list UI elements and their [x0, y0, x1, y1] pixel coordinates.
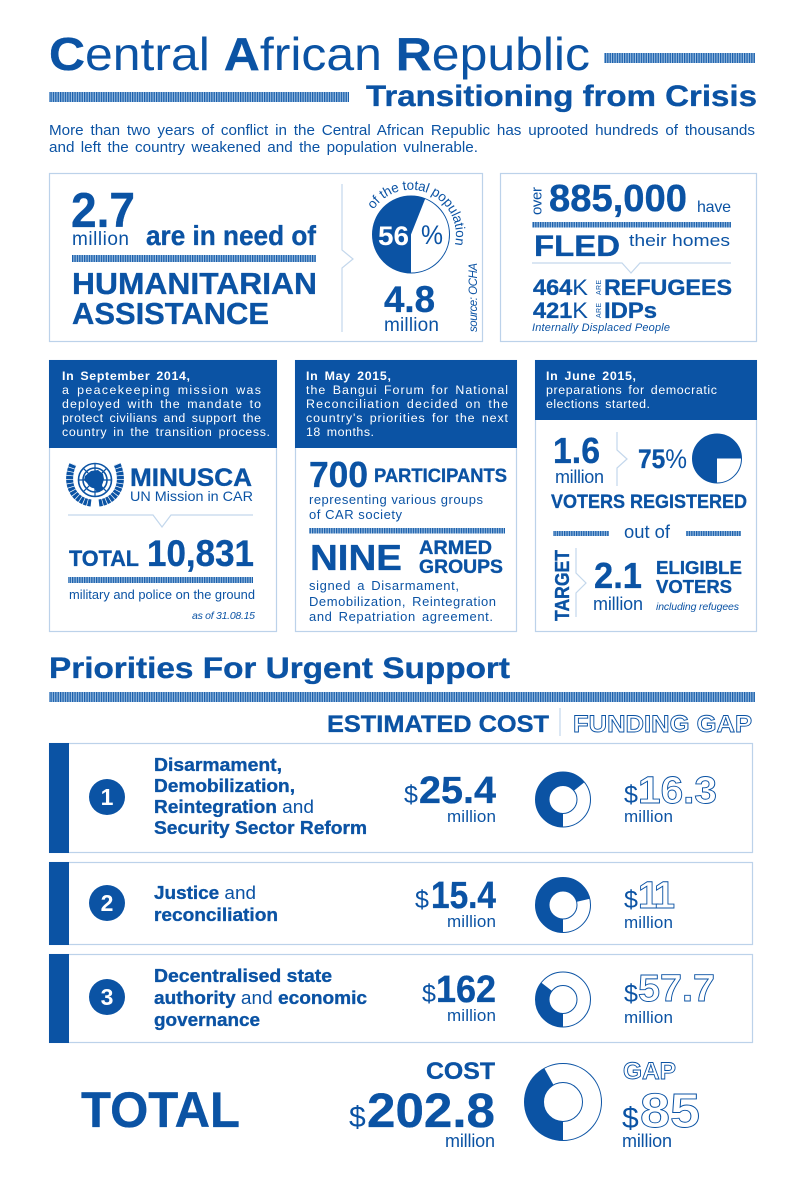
header: September 2014: deployed with the mandate to — [62, 397, 261, 411]
heading: fled their homes: their homes — [629, 231, 730, 250]
header: May 2015 — [295, 360, 517, 448]
heading: fled their homes: FLED — [534, 230, 620, 263]
divider label: out of — [553, 522, 741, 542]
total cost: 202.8 — [367, 1085, 495, 1138]
cost: million — [447, 807, 496, 826]
number badge 3 — [89, 979, 125, 1015]
header: June 2015: In June 2015, — [546, 369, 636, 383]
curved label: of the total population: of the total population — [369, 181, 466, 245]
statistic: total 10,831 — [69, 533, 254, 574]
source note: source: OCHA — [468, 263, 480, 332]
funding gap: $ — [624, 980, 638, 1008]
panel: priority 2 — [49, 862, 752, 945]
cost: 15.4 — [431, 875, 496, 917]
statistic: 2.7 million: 2.7 — [71, 184, 135, 238]
number badge 1 — [89, 779, 125, 815]
total cost: million — [445, 1131, 495, 1151]
cost: $ — [404, 781, 418, 809]
heading: humanitarian assistance: HUMANITARIAN — [72, 266, 317, 301]
panel: elections — [535, 360, 757, 632]
heading: are in need of: are in need of — [146, 220, 317, 251]
header: September 2014 — [49, 360, 277, 448]
header: May 2015: 18 months. — [306, 425, 374, 439]
statistic: 700 participants — [309, 454, 507, 495]
arrow: chevron divider — [342, 184, 353, 332]
intro text: and left the country weakened and the population vulnerable. — [49, 140, 478, 156]
header: September 2014: a peacekeeping mission was — [62, 383, 261, 397]
rotated label: target: TARGET — [552, 550, 574, 621]
caption: military and police: military and police on the ground — [69, 588, 255, 602]
statistic: 4.8 million: 4.8 — [384, 279, 435, 320]
heading: MINUSCA — [130, 464, 253, 504]
heading: fled their homes — [534, 230, 730, 263]
funding gap: million — [624, 913, 673, 932]
priority title: Justice and — [154, 882, 256, 903]
statistic: 2.7 million: million — [72, 229, 129, 250]
total gap: $ — [622, 1102, 639, 1135]
funding gap: 11 — [638, 875, 675, 917]
date note: as of 31.08.15 — [192, 610, 255, 622]
header: June 2015: elections started. — [546, 397, 650, 411]
statistic: refugees: 464K — [533, 275, 588, 300]
heading: MINUSCA: MINUSCA — [130, 464, 252, 492]
total gap: GAP — [623, 1058, 676, 1085]
label: total: TOTAL — [81, 1082, 240, 1138]
donut chart — [535, 972, 590, 1027]
icon: UN emblem — [70, 462, 120, 503]
total cost — [349, 1058, 495, 1151]
panel: priority 1 — [49, 743, 752, 853]
cost: million — [447, 912, 496, 931]
statistic: 700 participants: 700 — [309, 454, 368, 495]
statistic: nine armed groups — [310, 537, 503, 578]
funding gap: 16.3 — [638, 770, 717, 812]
heading: over 885,000 have: 885,000 — [549, 178, 687, 220]
priority title: Security Sector Reform — [154, 817, 367, 838]
funding gap — [624, 875, 675, 932]
header: May 2015: In May 2015, — [306, 369, 391, 383]
arrow: callout line — [532, 263, 731, 273]
cost: $ — [415, 886, 429, 914]
priority title: governance — [154, 1009, 260, 1030]
pie chart: 56 percent — [372, 196, 450, 273]
arrow: callout line — [68, 515, 253, 527]
cost: 162 — [436, 969, 496, 1011]
total cost: COST — [426, 1058, 495, 1085]
donut chart — [536, 772, 590, 827]
header: May 2015: country's priorities for the next — [306, 411, 509, 425]
panel: displaced people — [500, 174, 756, 342]
donut chart: total — [524, 1064, 602, 1141]
statistic: IDPs — [533, 298, 657, 323]
funding gap: $ — [624, 781, 638, 809]
statistic: 2.1 million: 2.1 — [594, 555, 642, 596]
priority title: Reintegration and — [154, 796, 314, 817]
cost: $ — [422, 980, 436, 1008]
priority title — [154, 965, 367, 1030]
header: September 2014: In September 2014, — [62, 369, 190, 383]
column headings — [327, 708, 752, 738]
header: September 2014: protect civilians and support the — [62, 411, 261, 425]
number badge 2: 2 — [101, 890, 113, 916]
statistic: refugees — [533, 275, 732, 300]
priority title: Decentralised state — [154, 965, 332, 986]
funding gap — [624, 770, 717, 826]
cost — [422, 969, 496, 1025]
total gap — [622, 1058, 700, 1151]
divider label: out of: out of — [624, 522, 671, 542]
column headings: FUNDING GAP — [573, 711, 752, 738]
statistic: nine armed groups: GROUPS — [419, 557, 503, 578]
pie chart: 56 percent: % — [421, 220, 443, 250]
heading: eligible voters: including refugees — [656, 601, 740, 613]
panel: priority 3 — [49, 954, 752, 1043]
header: May 2015: the Bangui Forum for National — [306, 383, 508, 397]
heading: over 885,000 have — [528, 178, 731, 220]
priority title — [154, 882, 278, 925]
statistic: nine armed groups: ARMED — [419, 538, 492, 559]
number badge 1: 1 — [101, 784, 114, 810]
statistic: 700 participants: PARTICIPANTS — [374, 466, 507, 487]
total row — [81, 1058, 700, 1151]
column headings: ESTIMATED COST — [327, 711, 549, 738]
statistic: IDPs: 421K — [533, 298, 588, 323]
funding gap: million — [624, 807, 673, 826]
priority title: Demobilization, — [154, 775, 295, 796]
caption: agreement: and Repatriation agreement. — [309, 609, 493, 624]
header: June 2015 — [535, 360, 757, 420]
heading: humanitarian assistance: ASSISTANCE — [72, 296, 269, 331]
caption: representing groups: representing various groups — [309, 492, 484, 507]
statistic: 2.1 million — [593, 555, 643, 614]
statistic: 4.8 million: million — [384, 315, 439, 336]
caption: agreement — [309, 578, 496, 624]
statistic: 1.6 million: 1.6 — [553, 430, 600, 471]
statistic: IDPs: ARE — [596, 303, 603, 318]
panel: Bangui Forum — [295, 360, 517, 632]
arrow: chevron divider — [576, 548, 586, 617]
funding gap: $ — [624, 886, 638, 914]
priority title: authority and economic — [154, 987, 367, 1008]
pie chart: 56 percent: 56 — [378, 221, 409, 251]
heading: humanitarian assistance — [72, 266, 317, 331]
heading: voters registered: VOTERS REGISTERED — [551, 491, 747, 513]
statistic: total 10,831: TOTAL — [69, 546, 139, 571]
statistic: total 10,831: 10,831 — [147, 533, 254, 574]
funding gap: million — [624, 1008, 673, 1027]
cost: million — [447, 1006, 496, 1025]
heading: over 885,000 have: over — [528, 187, 546, 215]
heading: over 885,000 have: have — [697, 199, 731, 216]
statistic: 75 percent: 75% — [638, 444, 687, 474]
header: May 2015: Reconciliation decided on the — [306, 397, 508, 411]
intro text — [49, 123, 755, 156]
total cost: $ — [349, 1101, 366, 1134]
panel: MINUSCA — [49, 360, 277, 632]
heading: MINUSCA: UN Mission in CAR — [130, 488, 253, 504]
subtitle — [49, 80, 757, 113]
section heading: priorities: Priorities For Urgent Support — [49, 652, 510, 685]
cost: 25.4 — [419, 770, 496, 812]
caption: agreement: Demobilization, Reintegration — [309, 594, 496, 609]
funding gap — [624, 968, 715, 1027]
caption: representing groups — [309, 492, 484, 522]
statistic: nine armed groups: NINE — [310, 537, 402, 578]
donut chart — [536, 878, 590, 932]
subtitle: Transitioning from Crisis — [366, 80, 757, 113]
funding gap: 57.7 — [638, 968, 715, 1010]
section heading: priorities — [49, 652, 755, 702]
total gap: million — [622, 1131, 672, 1151]
note: internally displaced people: Internally Displaced People — [532, 322, 670, 334]
priority title: Disarmament, — [154, 754, 282, 775]
number badge 2 — [89, 885, 125, 921]
number badge 3: 3 — [101, 984, 113, 1010]
statistic: IDPs: IDPs — [604, 298, 657, 323]
caption: representing groups: of CAR society — [309, 507, 402, 522]
caption: agreement: signed a Disarmament, — [309, 578, 459, 593]
statistic: refugees: REFUGEES — [604, 275, 732, 300]
intro text: More than two years of conflict in the Central African Republic has uprooted hundreds of thousands — [49, 123, 755, 139]
title: Central African Republic — [49, 28, 590, 80]
header: June 2015: preparations for democratic — [546, 383, 717, 397]
statistic: 1.6 million: million — [555, 467, 604, 487]
statistic: 2.1 million: million — [593, 594, 643, 614]
cost — [415, 875, 496, 931]
panel: humanitarian need — [48, 172, 484, 342]
heading: eligible voters: VOTERS — [656, 577, 732, 597]
header: September 2014: country in the transition process. — [62, 425, 270, 439]
arrow: chevron divider — [617, 432, 627, 486]
cost — [404, 770, 496, 826]
total gap: 85 — [640, 1085, 700, 1138]
statistic: 4.8 million — [384, 279, 439, 336]
heading: eligible voters: ELIGIBLE — [656, 558, 742, 578]
statistic: refugees: ARE — [596, 280, 603, 295]
heading: eligible voters — [656, 558, 742, 613]
priority title — [154, 754, 367, 838]
pie chart: 75 percent — [692, 434, 742, 483]
priority title: reconciliation — [154, 904, 278, 925]
